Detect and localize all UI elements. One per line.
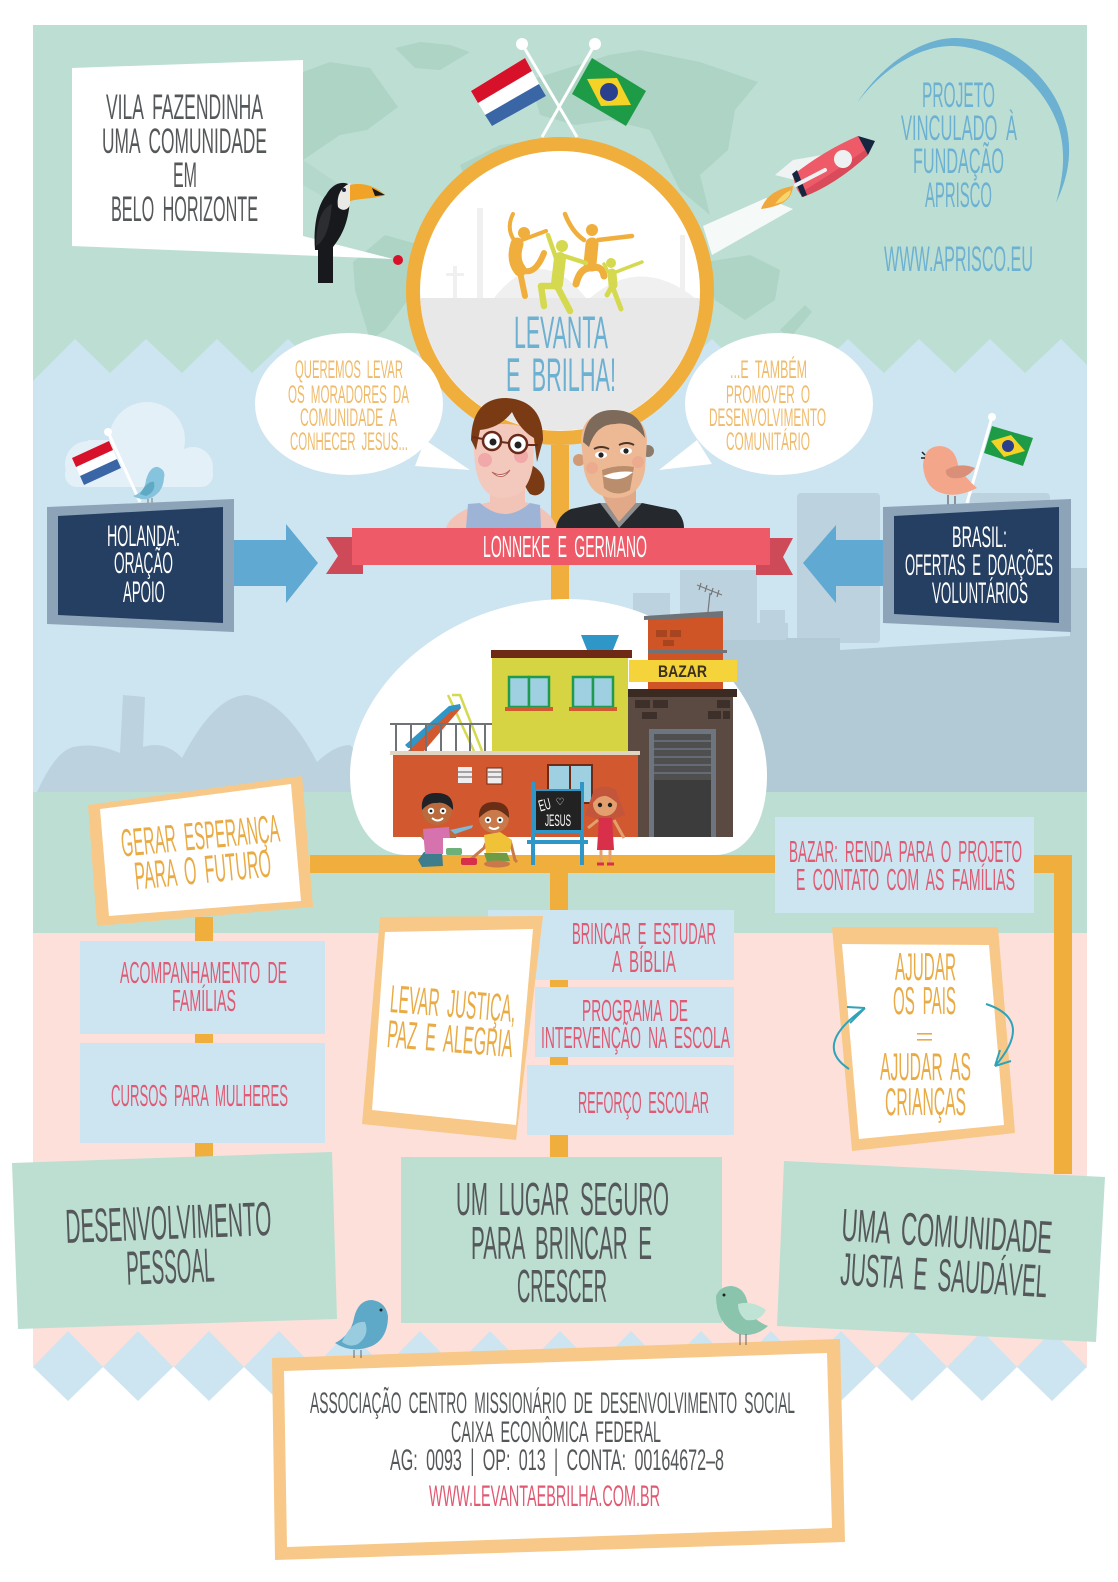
jumping figures (510, 214, 642, 311)
footer box: AG: 0093 | OP: 013 | CONTA: 00164672–8 (390, 1444, 724, 1477)
location marker (393, 255, 403, 265)
footer box: WWW.LEVANTAEBRILHA.COM.BR (429, 1480, 660, 1513)
box: Levar justiça, paz e alegria (362, 916, 543, 1140)
infographic canvas: LEVAR JUSTIÇA, (388, 978, 518, 1031)
banner: Lonneke e Germano (326, 528, 793, 575)
skyline: city buildings (633, 493, 1087, 792)
green box: Uma comunidade justa e saudável (777, 1161, 1105, 1342)
world map (303, 42, 812, 340)
logo circle (413, 144, 707, 438)
white dome behind building (350, 599, 767, 855)
title speech box (72, 60, 393, 259)
box: Acompanhamento de famílias: ACOMPANHAMENTO DE (120, 955, 287, 990)
icon: crossed flags (471, 38, 646, 137)
infographic canvas: REFORÇO ESCOLAR (578, 1085, 709, 1120)
green box: Desenvolvimento pessoal: PESSOAL (125, 1239, 215, 1296)
icon: rocket (703, 136, 875, 255)
girl (585, 786, 625, 864)
logo circle: E BRILHA! (506, 348, 616, 401)
box: Reforço escolar (527, 1065, 734, 1135)
banner: Lonneke e Germano: LONNEKE E GERMANO (483, 529, 647, 564)
speech bubble: left: OS MORADORES DA (288, 381, 409, 409)
green box: Um lugar seguro: UM LUGAR SEGURO (456, 1173, 669, 1225)
project text: FUNDAÇÃO (913, 142, 1004, 181)
box: Ajudar os pais: CRIANÇAS (885, 1081, 966, 1124)
box: Programa de intervenção na escola: PROGRAMA DE (582, 993, 688, 1028)
arrows: cycle (834, 1004, 1013, 1069)
box: Gerar esperança (88, 776, 313, 926)
title speech box: VILA FAZENDINHA (106, 88, 263, 127)
project text: APRISCO (925, 176, 992, 215)
box: Bazar (775, 817, 1034, 913)
icon: small Dutch flag (72, 428, 140, 502)
footer box (272, 1339, 845, 1560)
icon: toucan (315, 183, 385, 283)
arrow: Brasil to banner (803, 525, 883, 603)
box: Ajudar os pais: OS PAIS (893, 980, 956, 1023)
logo circle: LEVANTA (514, 307, 608, 358)
green box: Desenvolvimento pessoal (12, 1152, 337, 1329)
speech bubble: right: PROMOVER O (726, 381, 810, 409)
box: Programa de intervenção na escola (535, 987, 734, 1057)
box: Acompanhamento de famílias: FAMÍLIAS (172, 983, 236, 1018)
box: Acompanhamento de famílias (80, 941, 325, 1034)
portrait: Lonneke (446, 398, 557, 528)
infographic canvas: BRINCAR E ESTUDAR (572, 916, 716, 951)
portrait: Germano (556, 410, 684, 528)
speech bubble: right (659, 333, 873, 475)
speech bubble: right: ...E TAMBÉM (730, 355, 807, 384)
project text (884, 76, 1033, 279)
icon: light blue bird (133, 467, 164, 503)
board: Brasil: BRASIL: (952, 521, 1007, 554)
box: Cursos para mulheres: CURSOS PARA MULHERES (111, 1078, 288, 1113)
arrow: Holanda to banner (234, 524, 318, 603)
green box: Desenvolvimento pessoal: DESENVOLVIMENTO (64, 1193, 272, 1254)
arc around project text (857, 38, 1069, 203)
icon: blue bird (335, 1300, 388, 1358)
diamonds (33, 1331, 1087, 1401)
boy with car (470, 802, 517, 868)
icon: peach bird with Brazilian flag (921, 413, 1033, 505)
infographic canvas: INTERVENÇÃO NA ESCOLA (541, 1020, 730, 1055)
speech bubble: right: DESENVOLVIMENTO (709, 404, 826, 432)
chalkboard: JESUS (545, 811, 571, 830)
board: Holanda: APOIO (123, 576, 165, 609)
icon: green bird (716, 1286, 768, 1345)
box: Levar justiça, paz e alegria: PAZ E ALEGRIA (385, 1013, 515, 1066)
board: Holanda (47, 499, 234, 632)
title speech box: EM (173, 156, 197, 195)
box: Brincar e estudar a Bíblia: A BÍBLIA (612, 944, 676, 979)
chalkboard: ♡ (556, 797, 565, 808)
building: community centre: BAZAR (658, 662, 707, 681)
board: Brasil (883, 499, 1071, 632)
chalkboard: EU (537, 796, 553, 815)
project text: PROJETO (922, 76, 995, 115)
board: Holanda: HOLANDA: (107, 520, 180, 553)
box: Ajudar os pais: AJUDAR AS (880, 1046, 971, 1089)
speech bubble: left (255, 333, 470, 475)
footer box: CAIXA ECONÔMICA FEDERAL (451, 1415, 661, 1449)
skyline: Sugarloaf mountains (37, 695, 400, 792)
green box: Um lugar seguro: PARA BRINCAR E (471, 1217, 652, 1269)
cloud (65, 402, 213, 487)
toy cars (446, 848, 462, 855)
connector stems (195, 445, 1072, 1174)
infographic canvas: GERAR ESPERANÇA (119, 808, 281, 866)
boy with plane (418, 793, 473, 867)
box: Gerar esperança: PARA O FUTURO (133, 843, 273, 899)
building: community centre (390, 583, 737, 837)
box: Cursos para mulheres (80, 1043, 325, 1143)
speech bubble: left: CONHECER JESUS... (290, 428, 408, 456)
speech bubble: left: QUEREMOS LEVAR (295, 356, 403, 384)
box: Ajudar os pais (832, 927, 1015, 1151)
speech bubble: left: COMUNIDADE A (300, 404, 397, 432)
green box: Um lugar seguro (401, 1157, 722, 1323)
board: Holanda: ORAÇÃO (114, 546, 173, 580)
children playing (418, 786, 625, 868)
playground slide (390, 695, 515, 751)
box: Ajudar os pais: AJUDAR (895, 946, 956, 989)
title speech box: BELO HORIZONTE (111, 190, 258, 229)
chalkboard (527, 782, 588, 865)
box: Brincar e estudar a Bíblia (488, 910, 734, 980)
green box: Um lugar seguro: CRESCER (517, 1260, 607, 1312)
speech bubble: right: COMUNITÁRIO (726, 427, 810, 456)
title speech box: UMA COMUNIDADE (102, 122, 267, 161)
